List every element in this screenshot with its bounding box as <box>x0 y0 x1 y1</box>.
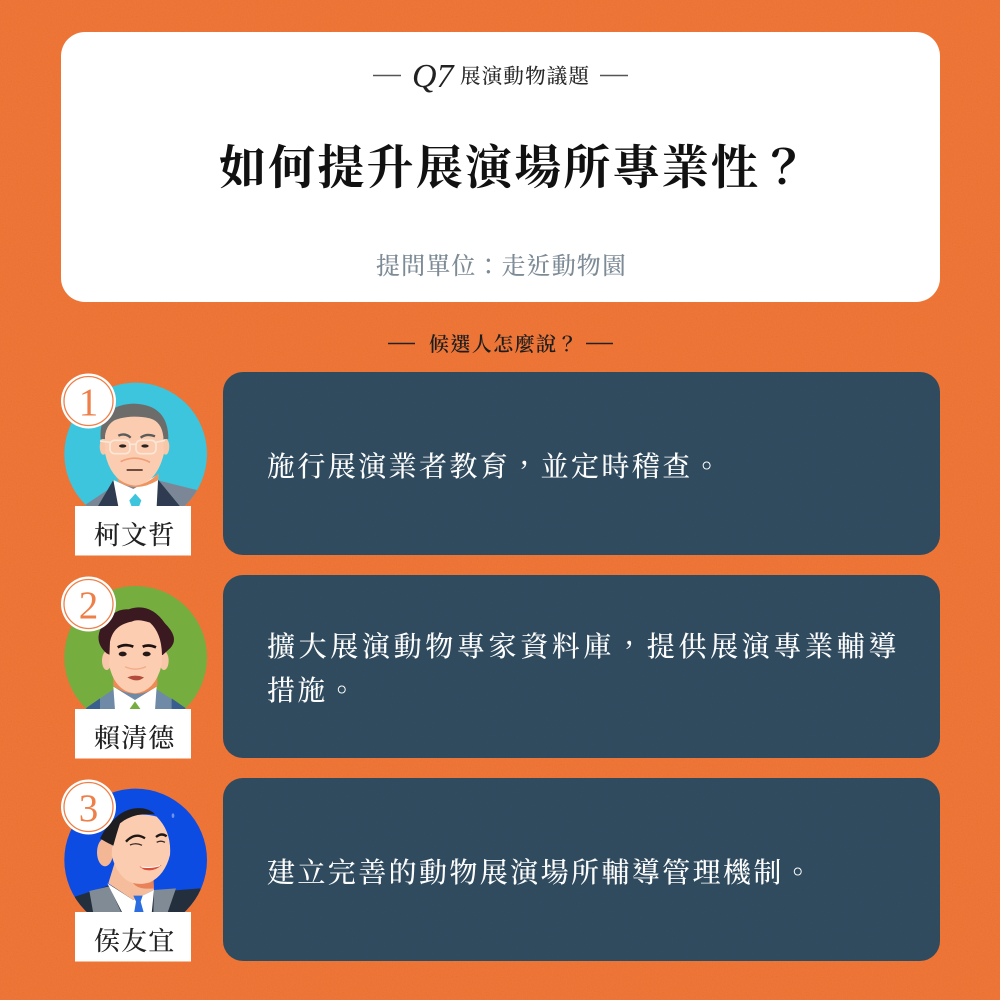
name label: 柯文哲: 柯文哲 <box>94 521 175 550</box>
panel: candidate 3 answer: 建立完善的動物展演場所輔導管理機制。 <box>267 857 814 889</box>
label: question number and topic: 展演動物議題 <box>460 65 590 88</box>
name label: 賴清德: 賴清德 <box>94 724 175 753</box>
name label: 賴清德 <box>75 709 191 758</box>
name label: 侯友宜 <box>75 912 191 962</box>
number badge 1: 1 <box>79 381 98 424</box>
portrait: candidate 1 Ko <box>64 382 207 506</box>
title: 如何提升展演場所專業性？ <box>219 143 809 195</box>
section heading: 候選人怎麼說？ <box>429 333 579 356</box>
panel: candidate 1 answer <box>223 372 940 555</box>
number badge 3: 3 <box>79 787 98 830</box>
portrait: candidate 2 Lai <box>64 586 207 709</box>
question source: 提問單位：走近動物園 <box>376 253 627 280</box>
panel: candidate 2 answer: 擴大展演動物專家資料庫，提供展演專業輔導 <box>267 631 900 663</box>
number badge 2 <box>61 576 116 632</box>
panel: candidate 3 answer <box>223 778 940 961</box>
name label: 侯友宜: 侯友宜 <box>94 927 175 956</box>
portrait: candidate 3 Hou <box>64 788 207 912</box>
panel: candidate 1 answer: 施行展演業者教育，並定時稽查。 <box>267 451 723 483</box>
panel: question header <box>61 32 940 302</box>
label: question number and topic <box>373 58 628 95</box>
panel: candidate 2 answer: 措施。 <box>267 675 358 707</box>
name label: 柯文哲 <box>75 506 191 556</box>
panel: candidate 2 answer <box>223 575 940 758</box>
number badge 2: 2 <box>79 584 98 627</box>
number badge 1 <box>61 374 116 428</box>
number badge 3 <box>61 780 116 834</box>
label: question number and topic: Q7 <box>412 58 456 95</box>
